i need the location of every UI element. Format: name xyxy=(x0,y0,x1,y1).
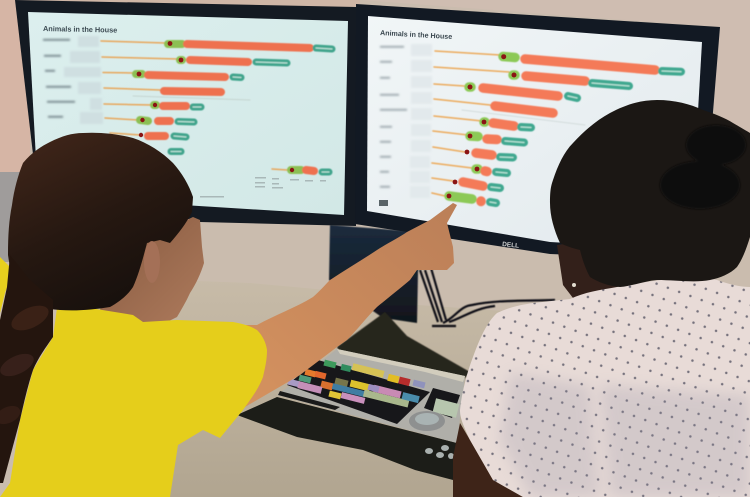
hair xyxy=(8,133,193,310)
left screen legend text xyxy=(200,177,326,198)
left screen xyxy=(28,12,348,215)
right screen xyxy=(367,16,702,250)
yellow shirt shoulder piece xyxy=(0,257,13,313)
person on left xyxy=(0,133,457,497)
colored keys xyxy=(287,360,459,418)
keyboard body xyxy=(277,349,465,443)
ear xyxy=(144,241,160,283)
right screen row labels xyxy=(380,44,432,198)
wrist rest buttons xyxy=(425,445,454,459)
keyboard xyxy=(237,349,465,480)
cables xyxy=(420,268,555,326)
hair bun xyxy=(660,125,746,209)
right screen logo xyxy=(379,200,388,206)
arm right person xyxy=(453,423,523,497)
neck and ear xyxy=(557,240,625,298)
black key field xyxy=(287,360,430,424)
dell logo: DELL xyxy=(502,241,519,250)
left screen bar chart xyxy=(101,41,332,172)
yellow shirt xyxy=(0,308,267,497)
right monitor xyxy=(355,4,720,260)
head hair xyxy=(550,100,750,287)
left screen title: Animals in the House xyxy=(43,24,117,35)
desk surface xyxy=(170,280,520,497)
dotted white shirt xyxy=(460,278,750,497)
right screen bar chart xyxy=(432,51,681,203)
earring xyxy=(572,283,576,287)
right screen title: Animals in the House xyxy=(380,29,452,41)
jog dial xyxy=(409,411,445,431)
person on right xyxy=(453,100,750,497)
braid xyxy=(0,255,53,483)
left monitor xyxy=(15,0,356,226)
face and neck xyxy=(100,217,204,322)
shirt shading xyxy=(500,373,750,497)
wrist rest xyxy=(237,397,457,480)
left screen row labels xyxy=(43,36,103,124)
right screen markers xyxy=(447,54,516,198)
monitor stand and base xyxy=(329,225,555,378)
pointing arm and hand xyxy=(240,203,457,407)
left screen markers xyxy=(137,41,294,172)
